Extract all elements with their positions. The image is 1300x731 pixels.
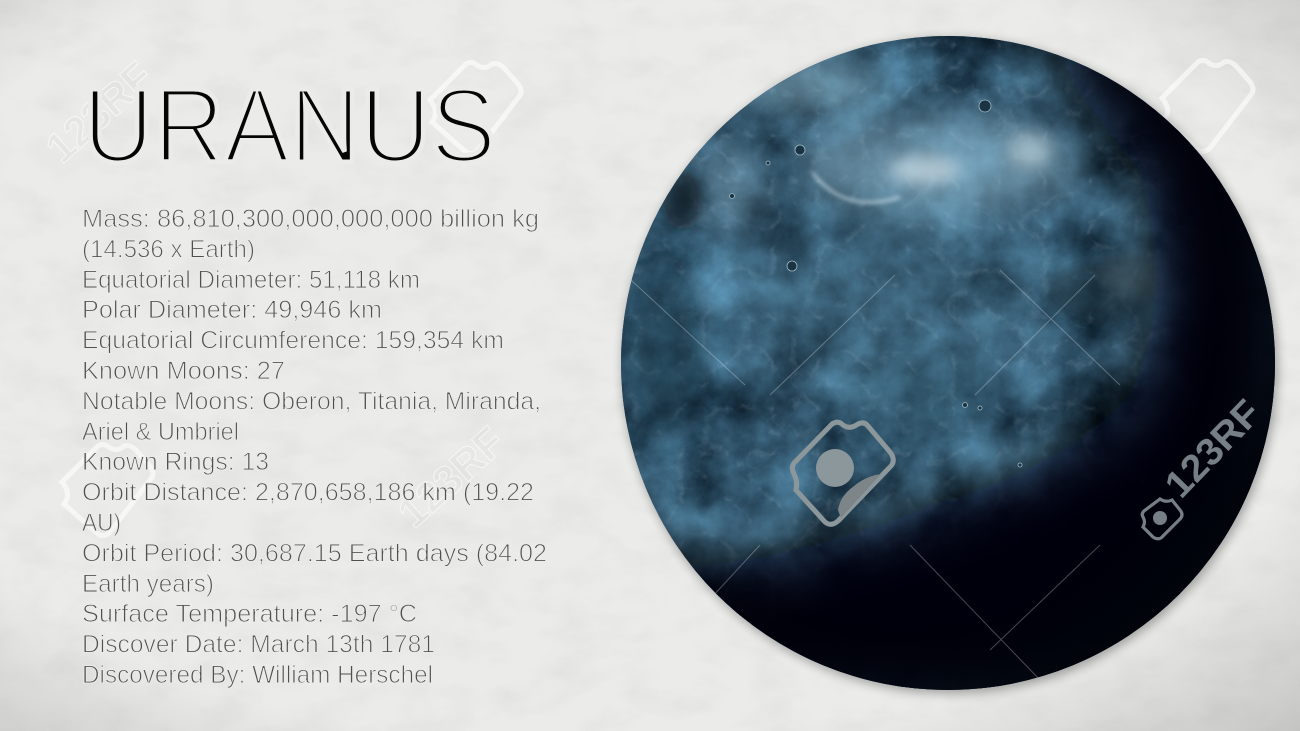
text block: planet facts: Mass: 86,810,300,000,000,000 billion kg — [82, 205, 539, 233]
title: URANUS — [83, 67, 496, 185]
watermark: 123RF on planet: 123RF — [1157, 392, 1269, 506]
text block: planet facts: Orbit Distance: 2,870,658,186 km (19.22 — [82, 479, 534, 507]
text block: planet facts: AU) — [82, 509, 121, 537]
text block: planet facts: Known Rings: 13 — [82, 448, 269, 476]
text block: planet facts: Polar Diameter: 49,946 km — [82, 296, 382, 324]
bright crater rim — [812, 172, 900, 202]
watermarks on paper: 123RF — [37, 52, 162, 172]
text block: planet facts — [82, 205, 547, 689]
text block: planet facts: Notable Moons: Oberon, Titania, Miranda, — [82, 387, 541, 415]
text block: planet facts: (14.536 x Earth) — [82, 235, 255, 263]
watermark hairlines — [620, 270, 1120, 680]
watermark: camera icon centre — [792, 422, 893, 524]
text block: planet facts: Known Moons: 27 — [82, 357, 285, 385]
text block: planet facts: Ariel & Umbriel — [82, 418, 239, 446]
text block: planet facts: Surface Temperature: -197 °C — [82, 600, 417, 628]
text block: planet facts: Discover Date: March 13th 1781 — [82, 631, 435, 659]
craters — [730, 100, 1022, 467]
watermark: 123RF on planet — [1142, 392, 1269, 539]
watermarks on paper: 123RF — [389, 417, 514, 537]
text block: planet facts: Orbit Period: 30,687.15 Earth days (84.02 — [82, 539, 547, 567]
ridged surface veins — [624, 36, 1152, 564]
watermarks on paper — [37, 52, 1253, 537]
text block: planet facts: Discovered By: William Herschel — [82, 661, 433, 689]
planet: Uranus — [620, 36, 1290, 710]
text block: planet facts: Earth years) — [82, 570, 214, 598]
planet shadow — [622, 38, 1278, 694]
text block: planet facts: Equatorial Circumference: 159,354 km — [82, 327, 504, 355]
text block: planet facts: Equatorial Diameter: 51,118 km — [82, 266, 420, 294]
terminator shadow — [667, 46, 1275, 690]
cloud masses — [627, 61, 1169, 440]
